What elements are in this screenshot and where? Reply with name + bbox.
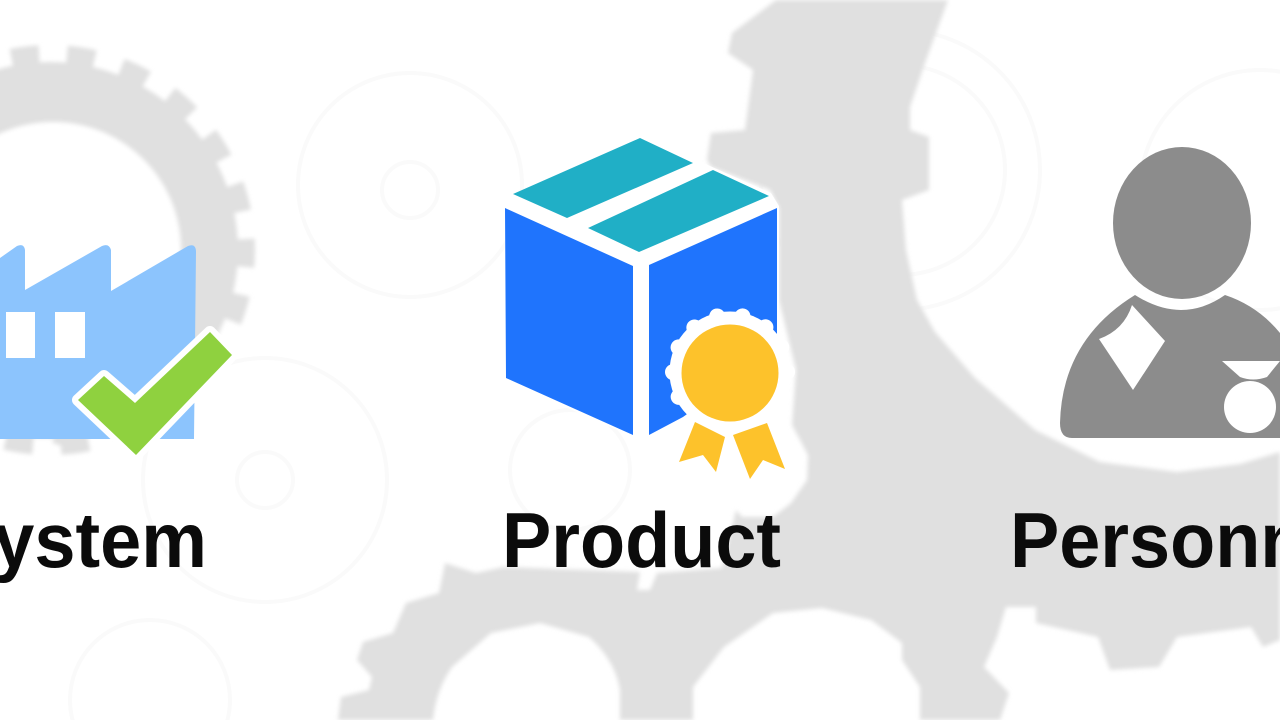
check mark — [78, 332, 232, 455]
collar diamond — [1099, 305, 1165, 390]
box lid — [513, 138, 769, 252]
label: Product: Product — [502, 496, 781, 584]
medal — [1222, 361, 1280, 380]
gear: left — [0, 43, 417, 634]
icon: personnel — [1060, 147, 1280, 438]
icon: product box with award ribbon — [505, 135, 795, 488]
head — [1113, 147, 1251, 299]
factory windows — [6, 312, 85, 358]
award ribbons — [679, 422, 785, 479]
icon: factory with check mark — [0, 245, 232, 455]
box faces — [505, 208, 777, 435]
gear: large merged background gears — [338, 0, 1280, 720]
factory building — [0, 245, 196, 439]
award medal — [682, 324, 778, 422]
award rosette outline — [670, 312, 795, 488]
box silhouette — [505, 135, 779, 437]
body — [1060, 295, 1280, 438]
